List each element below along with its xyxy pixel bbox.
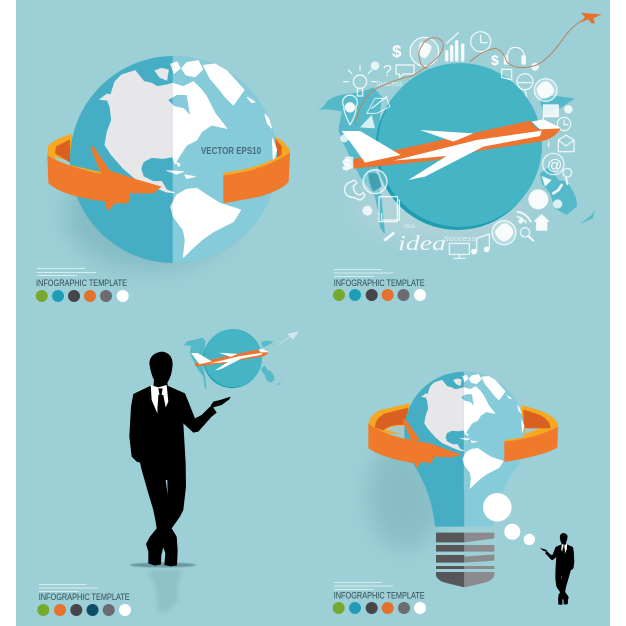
- airplane: [342, 119, 562, 180]
- legend: swatches and title: INFOGRAPHIC TEMPLATE: [334, 591, 425, 601]
- orange ring with plane: [368, 418, 558, 468]
- man silhouette: [129, 352, 231, 566]
- map and disc: [318, 63, 595, 233]
- man reflection: [148, 570, 182, 612]
- legend: swatches and title: [333, 582, 426, 614]
- globe: [70, 50, 283, 270]
- thought bubbles: [483, 493, 535, 545]
- doodle words: $: [342, 157, 351, 174]
- doodle words: idea: [398, 231, 446, 255]
- doodle words: Idea: [403, 224, 415, 230]
- small businessman: [540, 533, 574, 605]
- bulb body: [410, 427, 523, 527]
- disc shadow: [355, 180, 525, 240]
- doodle words: ?: [383, 63, 392, 80]
- bulb shadow: [367, 440, 443, 550]
- doodle words: Success: [376, 81, 403, 88]
- legend: swatches and title: [333, 269, 426, 301]
- bulb screw base: [436, 533, 494, 587]
- mini plane disc: [183, 329, 281, 389]
- orange ring with plane: [47, 146, 290, 212]
- panel: plane with doodle cloud: [318, 13, 602, 301]
- legend: swatches and title: INFOGRAPHIC TEMPLATE: [36, 278, 127, 288]
- panel: globe light bulb: [333, 368, 574, 614]
- legend: swatches and title: [36, 268, 129, 302]
- doodle words: $: [392, 42, 402, 61]
- ring back edges: [368, 403, 558, 448]
- legend: swatches and title: INFOGRAPHIC TEMPLATE: [334, 278, 425, 288]
- panel: globe with orange ring: [36, 50, 290, 302]
- mini plane trail: [279, 332, 298, 345]
- doodle words: $: [491, 52, 499, 68]
- doodle icons: [340, 32, 574, 258]
- doodle words: Success: [443, 234, 476, 243]
- legend: swatches and title: INFOGRAPHIC TEMPLATE: [39, 592, 130, 602]
- floor shadow: [130, 562, 196, 568]
- panel: businessman presenting plane: [37, 329, 298, 616]
- vector label: VECTOR EPS10: [201, 145, 261, 157]
- ring back edges: [47, 133, 290, 180]
- legend: swatches and title: [37, 584, 131, 616]
- doodle words: [342, 42, 562, 255]
- globe: [404, 368, 528, 496]
- flight path: [355, 21, 582, 125]
- small plane icon: [580, 13, 602, 23]
- doodle words: @: [547, 157, 562, 174]
- globe shadow: [65, 160, 235, 270]
